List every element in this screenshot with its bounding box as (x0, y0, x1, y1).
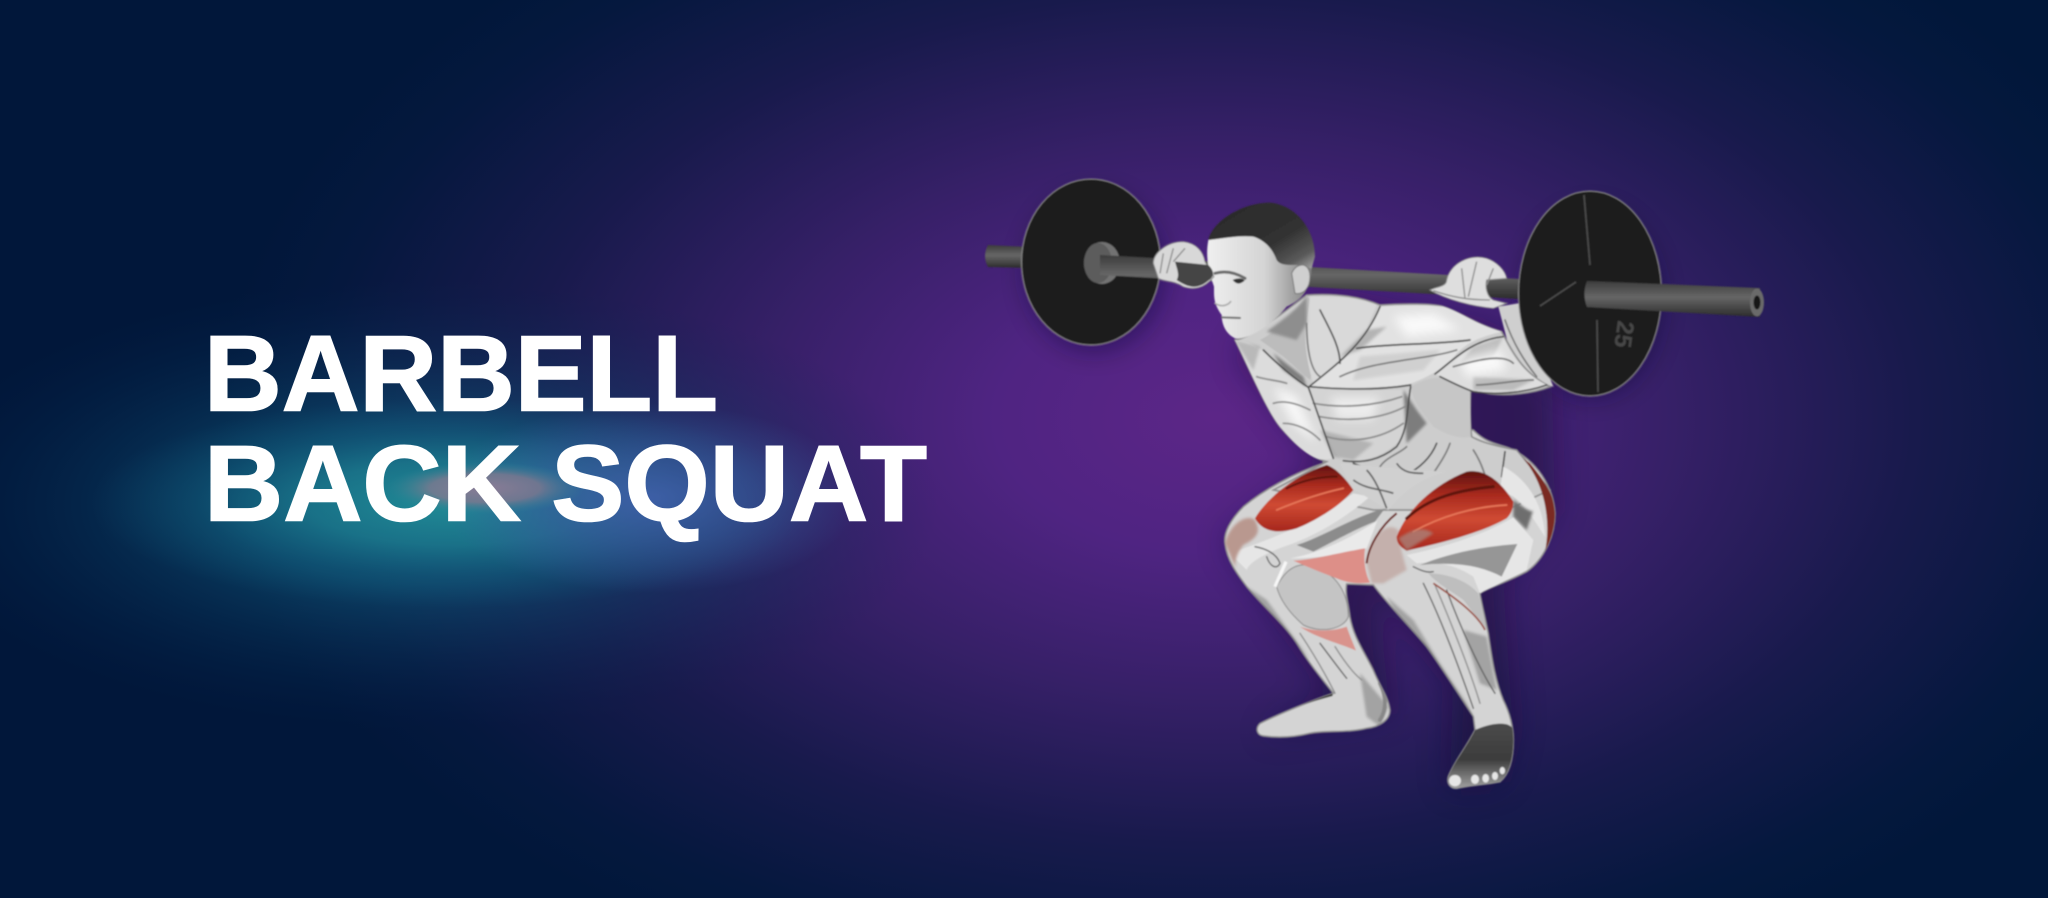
toes (1449, 767, 1505, 786)
left plate (1022, 179, 1160, 345)
figure drop shadow (1225, 293, 1555, 788)
quad fibres (1277, 477, 1507, 532)
right calf muscle (1428, 573, 1487, 630)
forearm to plate (1498, 303, 1553, 387)
torso silhouette (1235, 294, 1550, 510)
right hamstring bands (1407, 517, 1533, 593)
front arm strip (1235, 340, 1333, 460)
ear (1292, 265, 1310, 294)
left hand (1153, 242, 1214, 288)
leg lines (1255, 547, 1495, 720)
right sleeve (1584, 281, 1764, 317)
left teal glow (0, 280, 940, 730)
left quadriceps (1255, 465, 1353, 531)
hair (1208, 203, 1315, 268)
plate number: 25 (1608, 319, 1639, 349)
adductor (1293, 548, 1370, 583)
barbell and athlete (985, 179, 1764, 788)
upper chest (1305, 297, 1377, 383)
right quadriceps (1397, 471, 1513, 551)
barbell shadow (1025, 192, 1662, 398)
muscle shading (1235, 327, 1533, 460)
highlights (1273, 313, 1507, 443)
neck shadow (1267, 297, 1307, 340)
upper body (1153, 203, 1553, 510)
chest (1308, 387, 1406, 461)
leg muscles (1225, 458, 1556, 788)
face (1207, 233, 1312, 338)
left bar end (985, 245, 1030, 268)
right hand (1430, 257, 1507, 308)
shin shading (1247, 587, 1497, 727)
triceps (1411, 378, 1471, 438)
upper arm (1435, 337, 1547, 393)
right quad lower greying (1398, 529, 1433, 551)
title: BACK SQUAT (204, 424, 927, 544)
lower body base (1225, 430, 1555, 788)
hip panel (1500, 467, 1545, 537)
title: BARBELL (204, 314, 718, 434)
neck (1260, 295, 1327, 380)
abdomen (1354, 464, 1436, 510)
right foot (1447, 724, 1514, 788)
left collar (1084, 242, 1120, 284)
left thigh bands (1230, 493, 1370, 570)
facial features (1215, 272, 1245, 318)
left calf (1277, 565, 1348, 630)
right knee (1367, 527, 1407, 583)
main bar (1100, 255, 1520, 299)
shin band (1300, 627, 1356, 651)
tibialis line (1433, 583, 1485, 630)
title (204, 314, 927, 544)
knee tendon (1275, 562, 1286, 587)
right plate (1518, 191, 1662, 396)
deltoid (1310, 305, 1502, 388)
left knee (1225, 518, 1258, 570)
plate seams (1540, 195, 1598, 392)
muscle lines (1257, 307, 1547, 485)
glute edge (1523, 458, 1556, 552)
